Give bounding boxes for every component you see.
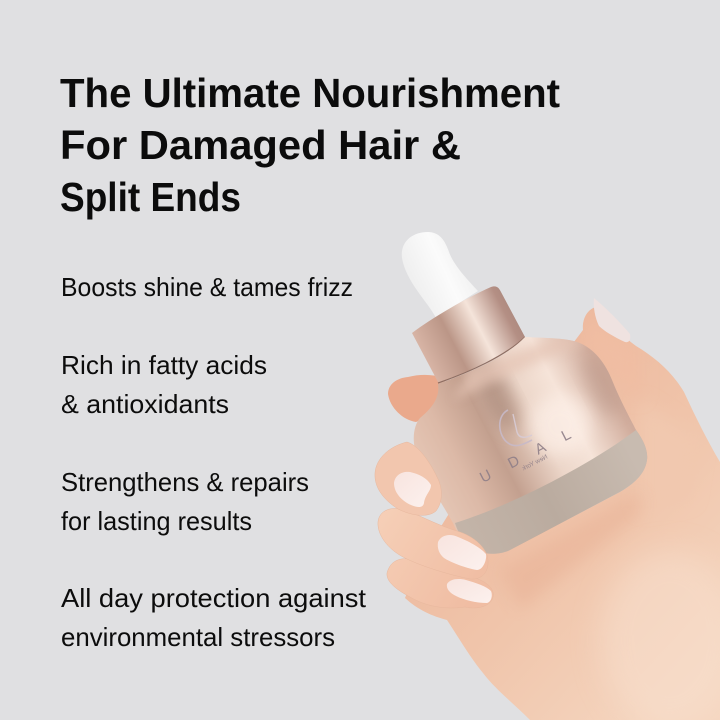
benefit: protection: environmental stressors xyxy=(61,622,335,652)
benefit: fatty acids xyxy=(61,350,267,419)
bottle body xyxy=(414,335,647,554)
benefit: strengthens xyxy=(61,467,309,536)
benefit: strengthens: Strengthens & repairs xyxy=(61,467,309,497)
ring finger xyxy=(378,508,488,579)
dropper bulb xyxy=(402,232,478,318)
benefit: fatty acids: Rich in fatty acids xyxy=(61,350,267,380)
index finger xyxy=(388,375,445,422)
pinky nail xyxy=(447,579,492,603)
benefit: fatty acids: & antioxidants xyxy=(61,389,229,419)
middle finger xyxy=(375,442,441,515)
title: Split Ends xyxy=(60,174,241,220)
ring nail xyxy=(438,535,486,570)
benefit: protection: All day protection against xyxy=(61,583,367,613)
title: For Damaged Hair & xyxy=(60,122,461,168)
title: The Ultimate Nourishment xyxy=(60,70,560,116)
thumb nail xyxy=(594,298,630,342)
bottle collar xyxy=(412,286,525,383)
benefit: shine: Boosts shine & tames frizz xyxy=(61,272,353,302)
benefit: protection xyxy=(61,583,367,652)
benefit: strengthens: for lasting results xyxy=(61,506,252,536)
bottle base xyxy=(455,430,647,554)
title xyxy=(60,70,560,220)
brand logo: U D A L xyxy=(477,426,574,487)
brand logo: New York xyxy=(521,454,549,473)
palm and thumb xyxy=(405,307,720,720)
hand holding bottle xyxy=(375,232,720,720)
pinky finger xyxy=(387,559,493,608)
middle nail xyxy=(394,472,431,507)
collar seam xyxy=(438,337,525,383)
